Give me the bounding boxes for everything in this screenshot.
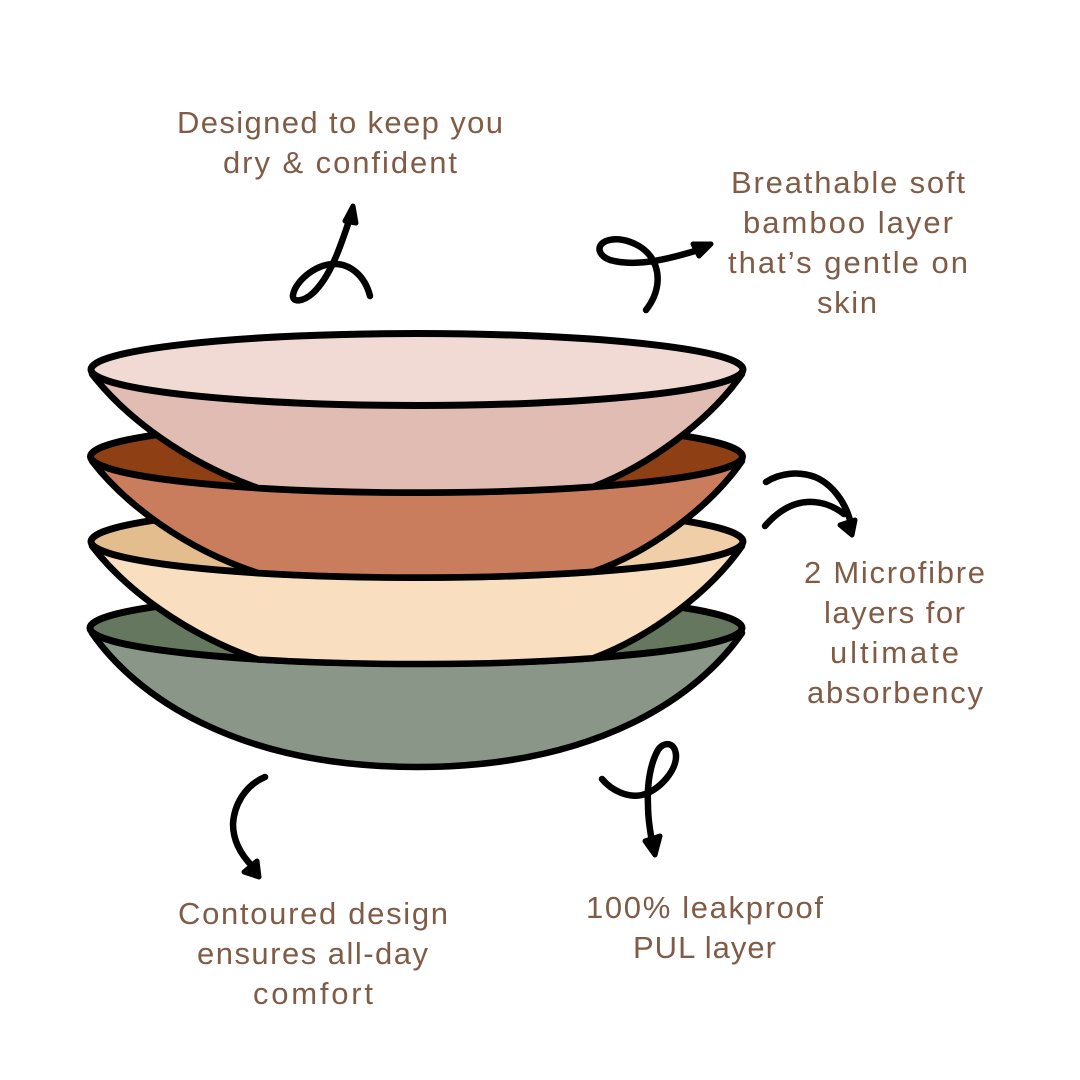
layer: pink bamboo bowl	[91, 334, 743, 493]
label: contoured design: ensures all-day	[197, 936, 428, 971]
stacked layers diagram	[90, 334, 743, 767]
label: designed to keep you dry: dry & confident	[223, 145, 457, 180]
label: leakproof layer: 100% leakproof	[586, 890, 823, 925]
layer: green leakproof bowl	[90, 592, 742, 767]
label: breathable bamboo layer: skin	[817, 285, 877, 320]
label: designed to keep you dry	[177, 105, 503, 180]
label: microfibre layers: 2 Microfibre	[804, 555, 985, 590]
label: microfibre layers	[804, 555, 985, 710]
label: leakproof layer: PUL layer	[633, 930, 776, 965]
arrow: to leakproof label	[602, 744, 676, 855]
label: contoured design: comfort	[253, 976, 373, 1011]
arrow: to bamboo label	[599, 239, 711, 310]
label: microfibre layers: ultimate	[830, 635, 959, 670]
layer: cream microfibre bowl	[91, 506, 743, 664]
label: designed to keep you dry: Designed to keep you	[177, 105, 503, 140]
arrow: to contoured label	[233, 777, 265, 877]
label: microfibre layers: layers for	[824, 595, 965, 630]
arrow: to microfibre label	[765, 474, 855, 535]
label: microfibre layers: absorbency	[807, 675, 984, 710]
layer: terracotta microfibre bowl	[90, 420, 742, 578]
label: contoured design: Contoured design	[178, 896, 448, 931]
arrow: to top label	[293, 206, 370, 300]
label: leakproof layer	[586, 890, 823, 965]
label: breathable bamboo layer	[728, 165, 968, 320]
label: breathable bamboo layer: that’s gentle on	[728, 245, 968, 280]
label: breathable bamboo layer: Breathable soft	[731, 165, 965, 200]
label: breathable bamboo layer: bamboo layer	[743, 205, 953, 240]
label: contoured design	[178, 896, 448, 1011]
